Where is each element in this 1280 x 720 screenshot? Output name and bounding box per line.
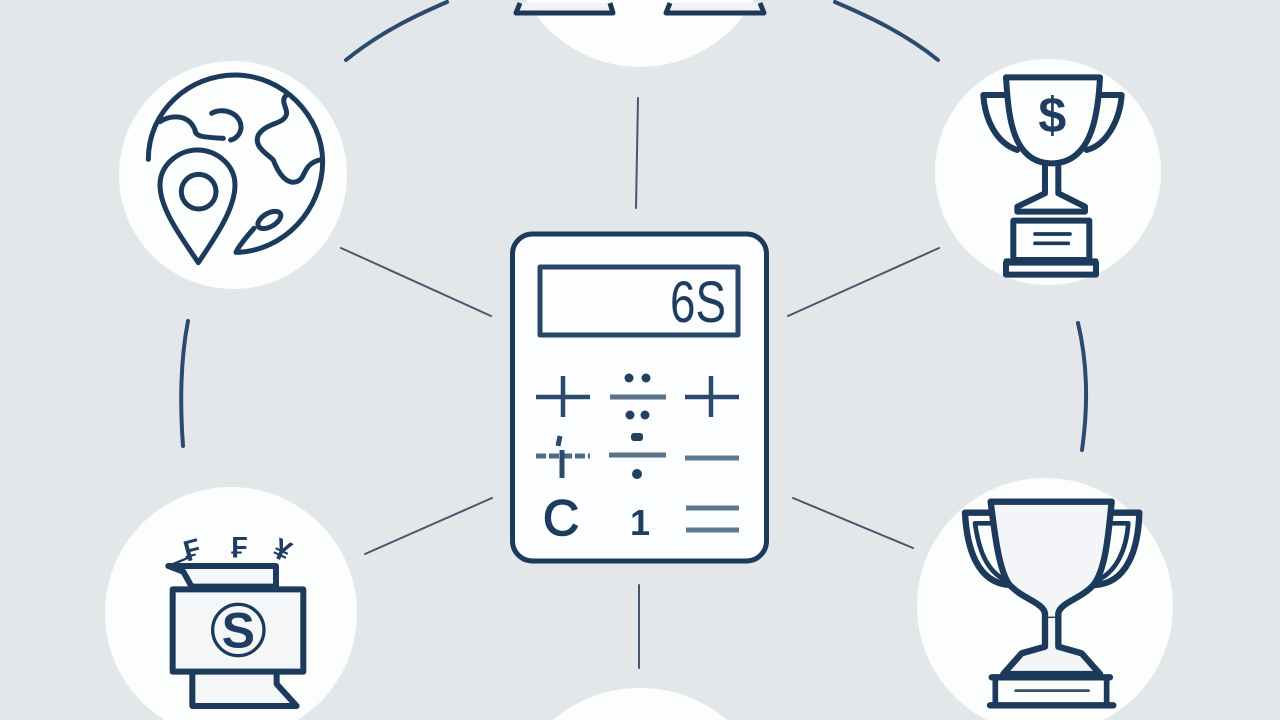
currency symbols [180, 531, 297, 569]
calculator [512, 234, 766, 561]
currency symbols: ₣ [180, 532, 204, 569]
outer ring arcs [181, 2, 1086, 450]
calculator keys: 1 [630, 502, 650, 543]
key labels: C [543, 490, 579, 546]
dollar sign: $ [1038, 87, 1066, 143]
icon node: top (cropped) [516, 0, 764, 67]
connector lines [341, 98, 939, 668]
icon node: plain trophy [917, 478, 1173, 720]
icon node: bottom (cropped) [553, 688, 727, 720]
icon node: banknote with currency symbols [105, 487, 357, 720]
icon node: trophy with dollar sign [935, 59, 1161, 285]
icon node: globe with location pin [119, 61, 347, 289]
currency symbols: ¥ [268, 532, 297, 569]
currency S mark: S [222, 603, 255, 659]
calculator keys [536, 374, 739, 546]
currency symbols: ₣ [231, 531, 247, 564]
calculator display [540, 267, 738, 335]
calculator display: 6S [670, 270, 726, 335]
